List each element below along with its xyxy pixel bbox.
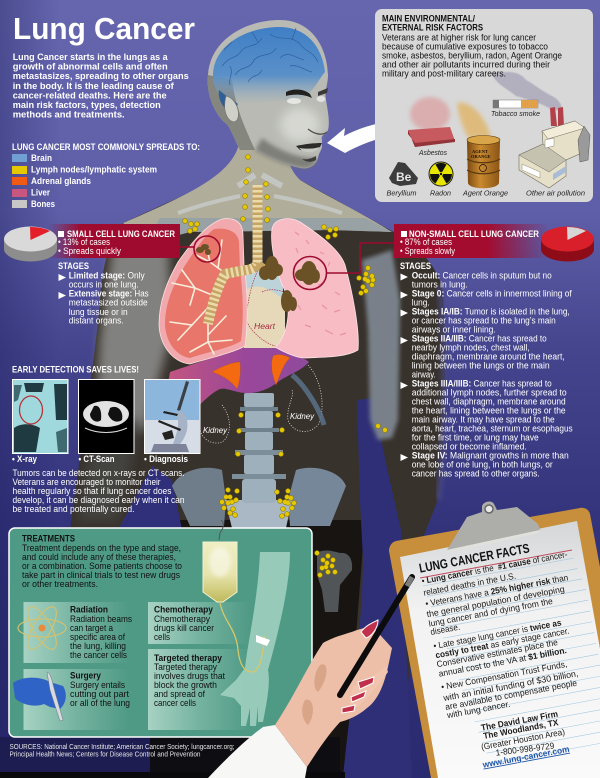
sources [10, 744, 235, 758]
small cell lung cancer banner: SMALL CELL LUNG CANCER [67, 229, 176, 239]
surgery box: Surgery [70, 671, 101, 681]
law firm contact [480, 709, 570, 770]
risk factors body: because of cumulative exposures to tobacco [382, 42, 548, 52]
risk factors heading [382, 14, 483, 33]
risk factors heading: EXTERNAL RISK FACTORS [382, 23, 483, 33]
shoulders [123, 140, 392, 244]
non-small cell stages: for the first time, or lung may have [412, 433, 539, 443]
targeted therapy box: cancer cells [154, 698, 197, 708]
icon: cigarette [491, 100, 540, 118]
pen [340, 577, 412, 695]
facts list [421, 549, 579, 720]
facts list: are available to compensate people [444, 678, 578, 712]
legend: spread sites: Adrenal glands [31, 176, 91, 186]
facts red rule [420, 550, 572, 578]
radiation box: Radiation [70, 605, 108, 615]
small cell stages: STAGES [58, 261, 89, 271]
pelvis bones [172, 468, 346, 528]
left body gap showing background [0, 466, 182, 778]
adrenal glands [212, 355, 290, 389]
chemotherapy box: drugs kill cancer [154, 623, 214, 633]
sleeve [208, 725, 307, 778]
intro text: methods and treatments. [13, 110, 125, 121]
heart area: Heart [254, 321, 276, 331]
detection text: develop, it can be diagnosed early when it can [12, 495, 185, 505]
small cell stages: occurs in one lung. [69, 280, 139, 290]
radiation box: Radiation beams [70, 614, 133, 624]
icon: radon: Radon [430, 189, 451, 198]
human body figure [0, 20, 445, 778]
facts list: • Veterans have a 25% higher risk than [425, 572, 569, 609]
radiation box [18, 602, 133, 663]
collarbones and ribs [178, 175, 342, 213]
icon: gloved hand with scalpel [13, 672, 66, 721]
non-small cell stages: airway. [412, 370, 436, 380]
bronchial tree [170, 240, 232, 354]
radiation box: the lung, killing [70, 641, 126, 651]
chemotherapy box: Chemotherapy [154, 614, 211, 624]
non-small cell stages: main airway. It may have spread to the [412, 415, 555, 425]
facts list: annual cost to the VA at $1 billion. [438, 645, 567, 679]
surgery box: cutting out part [70, 689, 130, 699]
small cell lung cancer banner: • Spreads quickly [58, 246, 122, 256]
clipboard board [389, 508, 600, 778]
kidney labels: Kidney [203, 425, 228, 435]
clipboard with facts [389, 502, 600, 778]
brain [213, 27, 325, 108]
jaw shadow [255, 138, 318, 169]
legend: spread sites: Lymph nodes/lymphatic system [31, 164, 157, 174]
smoke plume [492, 72, 562, 110]
non-small cell stages: chest wall, diaphragm, membrane around [412, 397, 566, 407]
iv bandage [256, 635, 270, 646]
ct scan image [78, 380, 134, 454]
non-small cell stages: diaphragm, membrane around the heart, [412, 352, 565, 362]
icon: radon [429, 162, 453, 198]
radiation box: specific area of [70, 632, 126, 642]
facts list: • Late stage lung cancer is twice as [433, 617, 562, 651]
facts list: with an initial funding of $30 billion, [442, 668, 579, 703]
facts list: related deaths in the U.S. [423, 571, 517, 598]
treatments panel [9, 520, 312, 737]
targeted therapy box: Targeted therapy [154, 662, 218, 672]
facts list: Conservative estimates place the [436, 637, 559, 669]
cheek highlight [280, 107, 320, 143]
icon: cigarette: Tobacco smoke [491, 109, 540, 118]
non-small cell lung cancer banner: • 87% of cases [400, 237, 453, 247]
treatments heading and intro: Treatment depends on the type and stage, [22, 543, 181, 553]
small cell stages: distant organs. [69, 316, 124, 326]
kidney labels [203, 411, 315, 435]
non-small cell stages: tumors in lung. [412, 280, 468, 290]
law firm contact: The David Law Firm [480, 709, 559, 733]
treatments heading and intro: or a combination. Some patients choose to [22, 561, 182, 571]
law firm contact: (Greater Houston Area) [480, 727, 566, 752]
head [208, 20, 329, 169]
non-small cell stages: cancer has spread to other organs. [412, 469, 540, 479]
clipboard paper [400, 521, 600, 778]
non-small cell stages: one lobe of one lung, in both lungs, or [412, 460, 553, 470]
intro text: cancer-related deaths. Here are the [13, 90, 167, 101]
non-small cell stages: Occult: Cancer cells in sputum but no [412, 271, 552, 281]
left lung cross section [159, 219, 247, 364]
targeted therapy box [148, 649, 250, 730]
paper rules [423, 557, 600, 770]
targeted therapy box: block the growth [154, 680, 217, 690]
non-small cell stages: additional lymph nodes, further spread to [412, 388, 567, 398]
non-small cell stages: Stages IA/IB: Tumor is isolated in the lung, [412, 307, 570, 317]
image captions: • CT-Scan [78, 454, 114, 464]
sources: SOURCES: National Cancer Institute; American Cancer Society; lungcancer.org; [10, 744, 235, 751]
legend: spread sites: Brain [31, 153, 52, 163]
torso and arms silhouette [60, 180, 445, 778]
spine [232, 393, 286, 503]
facts list: lung cancer and of dying from the [428, 596, 554, 629]
non-small cell lung cancer banner [294, 224, 550, 290]
small cell lung cancer banner: • 13% of cases [58, 237, 111, 247]
icon: beryllium: Be [396, 170, 412, 184]
non-small cell stages: lining between the lungs or the main [412, 361, 550, 371]
kidney labels: Kidney [290, 411, 315, 421]
early detection section [12, 365, 200, 514]
image captions [12, 454, 188, 464]
legend: spread sites: LUNG CANCER MOST COMMONLY SPREADS TO: [12, 142, 200, 152]
law firm contact: The Woodlands, TX [483, 717, 559, 741]
non-small cell stages: airways or inner lining. [412, 325, 496, 335]
lymph nodes [185, 128, 385, 575]
non-small cell stages: nearby lymph nodes, chest wall, [412, 343, 530, 353]
radiation box: can target a [70, 623, 113, 633]
treatments heading and intro: or other treatments. [22, 579, 98, 589]
small cell stages: lung tissue or in [69, 307, 128, 317]
facts list: costly to treat as early stage cancer. [435, 626, 570, 660]
image captions: • Diagnosis [144, 454, 188, 464]
right side gap showing background [343, 398, 412, 778]
back of head shade [208, 75, 255, 150]
clipboard clip [447, 502, 540, 553]
left lower arm shading [78, 420, 140, 520]
radiation box: the cancer cells [70, 650, 128, 660]
right femur [317, 551, 352, 612]
icon: beryllium: Beryllium [386, 189, 416, 198]
pie chart: 13 percent [4, 226, 57, 262]
icon: agent orange drum [457, 103, 500, 188]
hand holding pen [208, 577, 412, 778]
law firm contact: 1-800-998-9729 [495, 741, 555, 758]
facts list: • New Compensation Trust Funds, [440, 659, 568, 692]
risk factors panel [375, 9, 593, 202]
treatments heading and intro [22, 534, 182, 589]
facts list: • Lung cancer is the #1 cause of cancer- [421, 549, 568, 586]
detection text [12, 468, 185, 514]
image captions: • X-ray [12, 454, 37, 464]
callout connector and lung circle [180, 236, 220, 262]
pie chart: 87 percent [541, 226, 594, 262]
x-ray image [12, 380, 68, 454]
fingernails [342, 620, 378, 713]
legend: spread sites: Liver [31, 188, 51, 198]
kidneys dotted outlines [200, 365, 322, 443]
risk factors body: Veterans are at higher risk for lung cancer [382, 33, 536, 43]
intro text: growth of abnormal cells and often [13, 62, 168, 73]
hand [275, 626, 392, 767]
non-small cell stages: or cancer has spread to the lung’s main [412, 316, 556, 326]
non-small cell lung cancer banner: • Spreads slowly [400, 246, 456, 256]
facts list: disease. [430, 622, 461, 637]
right lung [272, 219, 358, 358]
non-small cell lung cancer banner: NON-SMALL CELL LUNG CANCER [409, 229, 540, 239]
facts list: with lung cancer. [445, 699, 511, 720]
right arm bone [362, 250, 400, 440]
small cell stages: metastasized outside [69, 298, 148, 308]
risk factors heading: MAIN ENVIRONMENTAL/ [382, 14, 475, 24]
ear [225, 96, 238, 122]
law firm contact: www.lung-cancer.com [481, 744, 570, 770]
surgery box: Surgery entails [70, 680, 126, 690]
arm receiving infusion [220, 552, 290, 726]
chemotherapy box: cells [154, 632, 171, 642]
risk factors body [382, 33, 562, 79]
iv bag [203, 520, 237, 602]
liver and diaphragm [162, 346, 309, 430]
brain lower lobe [219, 90, 238, 109]
treatments heading and intro: take part in clinical trials to test new drugs [22, 570, 181, 580]
targeted therapy box: and spread of [154, 689, 206, 699]
non-small cell stages: Stage 0: Cancer cells in innermost lining of [412, 289, 572, 299]
fingers [350, 666, 388, 708]
callout connector and lung circle [294, 243, 394, 290]
non-small cell stages: lung. [412, 298, 430, 308]
intro text: metastasizes, spreading to other organs [13, 71, 189, 82]
treatments heading and intro: TREATMENTS [22, 534, 75, 544]
intro text: Lung Cancer starts in the lungs as a [13, 52, 168, 63]
facts heading: LUNG CANCER FACTS [418, 540, 531, 576]
icon: atom [18, 603, 66, 653]
detection text: be treated and potentially cured. [12, 504, 134, 514]
non-small cell stages: aorta, heart, trachea, sternum or esophagus [412, 424, 573, 434]
chemotherapy box [148, 602, 250, 644]
non-small cell stages: the heart, lining between the lungs or the [412, 406, 566, 416]
lower body shadow [150, 520, 365, 778]
detection text: health regularly so that if lung cancer does [12, 486, 172, 496]
small cell stages: Extensive stage: Has [69, 289, 149, 299]
small cell stages: Limited stage: Only [69, 271, 145, 281]
hand shading [302, 664, 327, 725]
microscope image [144, 380, 200, 454]
left arm shading [95, 240, 172, 430]
trachea and bronchi [208, 185, 272, 324]
icon: asbestos [408, 97, 455, 157]
risk factors body: military and post-military careers. [382, 69, 506, 79]
non-small cell stages: STAGES [400, 261, 431, 271]
legend: spread sites: Bones [31, 199, 55, 209]
risk factors body: and other air pollutants incurred during their [382, 60, 550, 70]
non-small cell stages [400, 261, 573, 479]
non-small cell stages: Stages IIA/IIB: Cancer has spread to [412, 334, 547, 344]
arrow: air into mouth [327, 116, 470, 153]
nose and mouth [296, 129, 327, 162]
chemotherapy box: Chemotherapy [154, 605, 213, 615]
surgery box [13, 669, 130, 730]
risk factors body: smoke, asbestos, beryllium, radon, Agent Orange [382, 51, 562, 61]
icon: agent orange drum: AGENT [472, 149, 488, 154]
detection text: Veterans are encouraged to monitor their [12, 477, 161, 487]
surgery box: or all of the lung [70, 698, 130, 708]
icon: factory [519, 107, 590, 198]
icon: asbestos: Asbestos [418, 148, 447, 157]
intro text: main risk factors, types, detection [13, 100, 161, 111]
title: Lung Cancer [13, 11, 195, 46]
label: agent orange: Agent Orange [462, 189, 508, 198]
skull and face [208, 20, 329, 169]
sources: Principal Health News; Centers for Disease Control and Prevention [10, 752, 201, 758]
treatments heading and intro: and could include any of these therapies, [22, 552, 176, 562]
lower shoulder tint [145, 218, 392, 244]
eyes and brows [286, 88, 328, 104]
legend: spread sites [12, 142, 200, 209]
bottom band [0, 737, 345, 778]
targeted therapy box: involves drugs that [154, 671, 226, 681]
facts list: the general population of developing [426, 584, 565, 619]
detection text: Tumors can be detected on x-rays or CT scans. [12, 468, 184, 478]
tumors [196, 244, 320, 312]
right arm outer soft edge [438, 285, 444, 500]
targeted therapy box: Targeted therapy [154, 653, 222, 663]
iv tube [220, 603, 265, 672]
icon: factory: Other air pollution [526, 189, 585, 198]
early detection heading: EARLY DETECTION SAVES LIVES! [12, 365, 139, 375]
kidney shadow [292, 375, 324, 425]
small cell stages [58, 261, 149, 326]
brain folds [222, 28, 318, 85]
heart area [243, 262, 285, 348]
non-small cell stages: Stages IIIA/IIIB: Cancer has spread to [412, 379, 552, 389]
non-small cell stages: collapsed or become inflamed. [412, 442, 527, 452]
intro text [13, 52, 189, 121]
non-small cell stages: Stage IV: Malignant growths in more than [412, 451, 569, 461]
intro text: in the body. It is the leading cause of [13, 81, 174, 92]
icon: beryllium [386, 162, 418, 198]
small cell lung cancer banner [48, 224, 220, 262]
icon: agent orange drum: ORANGE [471, 154, 491, 159]
